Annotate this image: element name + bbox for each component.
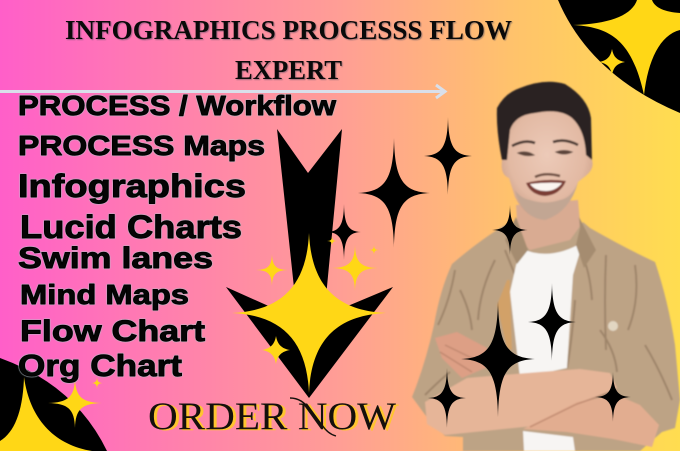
large yellow sparkle	[232, 233, 386, 393]
services list	[18, 90, 336, 383]
title: EXPERT	[235, 55, 342, 85]
brows	[512, 141, 578, 146]
corner: top right black shape with sparkles	[558, 0, 680, 113]
black downward arrow	[226, 129, 393, 398]
teeth	[530, 183, 562, 191]
smile	[526, 180, 566, 196]
title	[65, 15, 512, 85]
corner: bottom left black shape with sparkles	[0, 358, 107, 451]
services list: Flow Chart	[20, 315, 205, 348]
eyes	[518, 150, 572, 156]
services list: Mind Maps	[20, 279, 189, 310]
services list: PROCESS Maps	[18, 130, 265, 161]
lower forearm	[523, 395, 659, 447]
small yellow sparkles	[256, 236, 379, 364]
services list: Lucid Charts	[20, 209, 242, 245]
face	[502, 111, 593, 220]
jacket collars	[505, 217, 596, 268]
stubble	[515, 182, 578, 220]
order now call to action: ORDER NOW	[148, 395, 396, 438]
services list: PROCESS / Workflow	[18, 90, 336, 121]
upper forearm	[425, 369, 617, 435]
title: INFOGRAPHICS PROCESSS FLOW	[65, 15, 512, 45]
neck	[516, 200, 582, 262]
arm crease	[440, 345, 617, 427]
orange lining	[497, 280, 512, 350]
nose and moustache	[535, 174, 560, 177]
white t-shirt	[510, 242, 583, 378]
black sparkles	[327, 117, 631, 428]
arrow line under title	[0, 85, 445, 98]
hand	[435, 332, 492, 378]
services list: Swim lanes	[18, 242, 213, 275]
services list: Org Chart	[18, 348, 182, 383]
lower t-shirt	[523, 431, 575, 451]
pocket button	[608, 321, 618, 331]
jacket	[412, 222, 680, 451]
hair	[497, 82, 592, 168]
services list: Infographics	[18, 168, 246, 204]
jacket folds	[425, 250, 672, 400]
man portrait	[412, 82, 680, 451]
